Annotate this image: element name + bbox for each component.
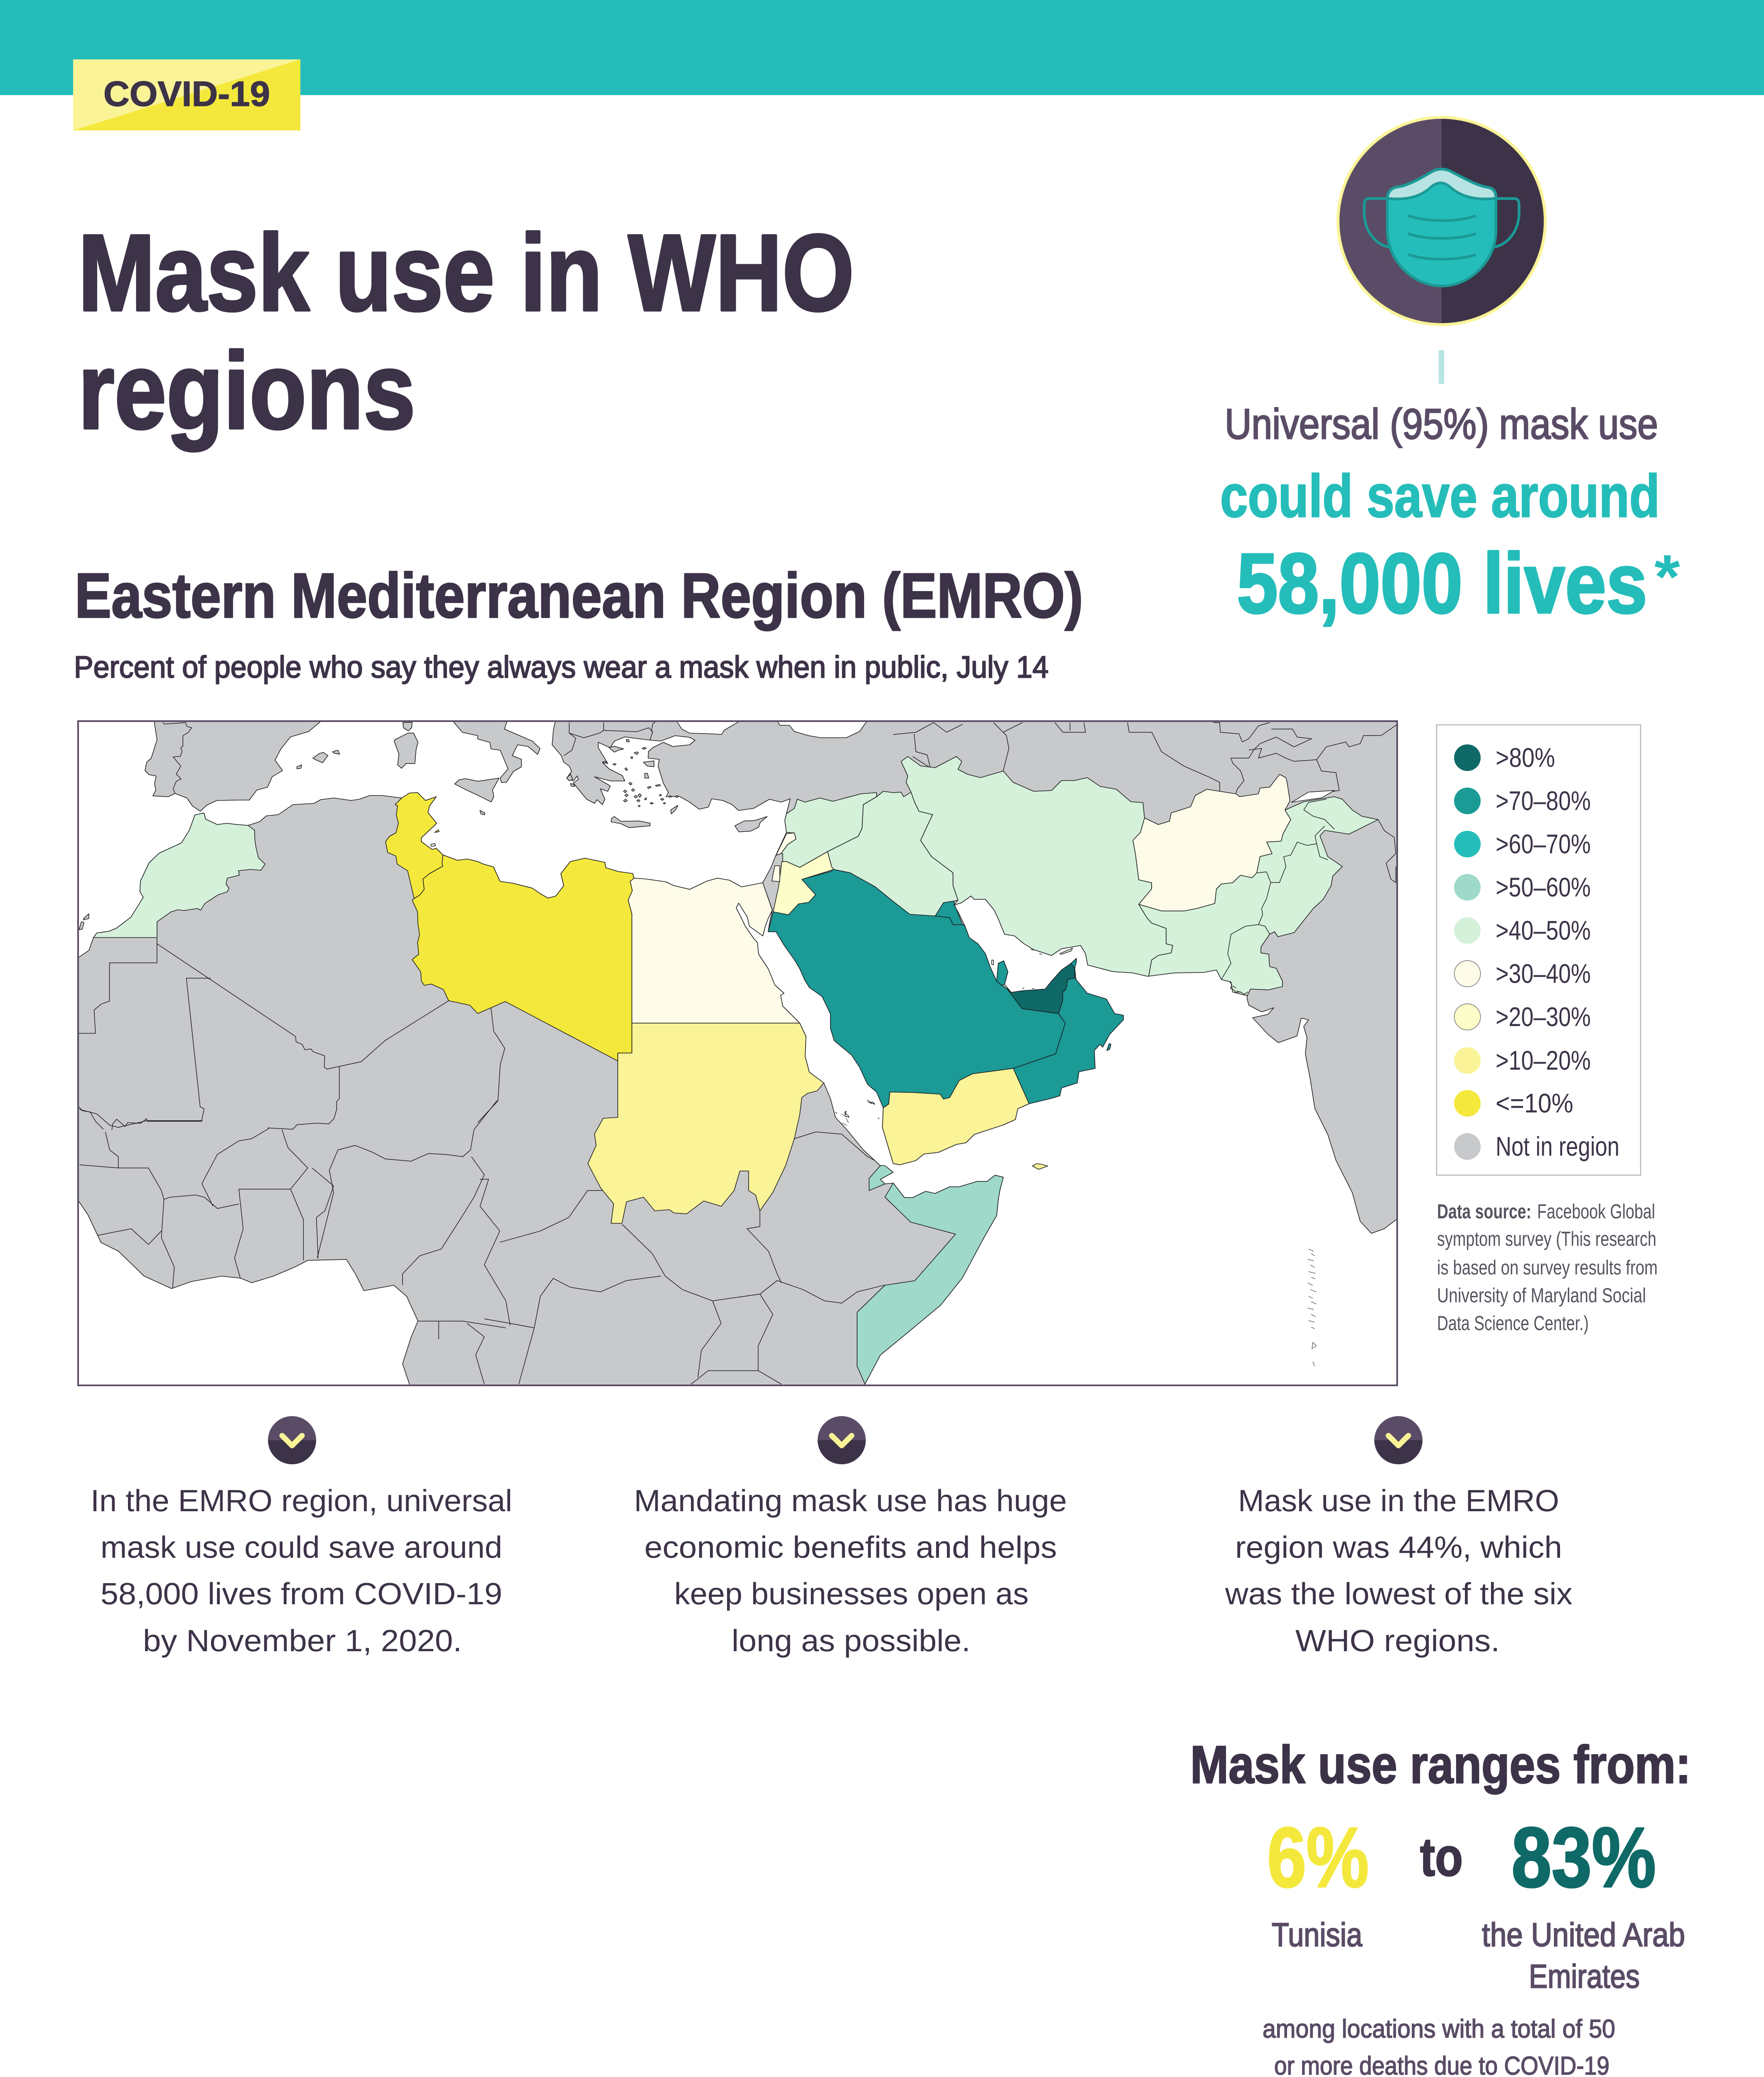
country: Pakistan [992,791,1378,996]
legend item: 40 to 50 percent: >40–50% [1496,915,1591,945]
legend item: 70 to 80 percent: >70–80% [1496,786,1591,816]
islands: western Mediterranean and Atlantic [79,722,499,930]
callout: universal mask use [1220,400,1680,631]
legend item: 10 to 20 percent: >10–20% [1496,1045,1591,1075]
maximum value: 83% [1511,1810,1656,1905]
minimum location: Tunisia [1272,1916,1362,1953]
text block: lives saved: mask use could save around [101,1530,502,1564]
COVID-19 tag: COVID-19 [103,74,270,114]
legend [1437,725,1641,1175]
legend item: greater than 80 percent: >80% [1496,742,1555,773]
country: Syria [781,793,877,867]
country: Palestine [772,866,780,881]
legend item: 30 to 40 percent: >30–40% [1496,958,1591,989]
text block: economic benefits: keep businesses open as [674,1576,1029,1611]
text block: lowest mask use: was the lowest of the six [1225,1576,1572,1611]
sea: eastern Black Sea [778,722,867,738]
data source note: Data Science Center.) [1437,1312,1589,1335]
icon: chevron 3 [1374,1416,1423,1464]
legend item: 20 to 30 percent: >20–30% [1496,1002,1591,1032]
text block: economic benefits: long as possible. [732,1623,970,1658]
country: Qatar [997,961,1008,985]
range heading: Mask use ranges from: [1190,1735,1691,1795]
text block: lives saved: by November 1, 2020. [143,1623,462,1658]
data source note: symptom survey (This research [1437,1228,1656,1250]
country: Sudan [588,1023,824,1223]
minimum value: 6% [1267,1810,1369,1905]
islands: Aegean, Crete and Cyprus [480,740,880,1119]
text block: lowest mask use: region was 44%, which [1235,1530,1562,1564]
text block: lowest mask use: Mask use in the EMRO [1238,1483,1559,1518]
maximum location [1482,1916,1685,1995]
country: Afghanistan [1133,774,1291,911]
legend item: 40 to 50 percent [1454,915,1591,945]
country: Egypt [628,878,800,1023]
legend item: 10 percent or less: <=10% [1496,1088,1573,1118]
choropleth map of EMRO [75,719,1402,1390]
country: Yemen [882,1068,1048,1169]
legend item: 20 to 30 percent [1454,1002,1591,1032]
islands: Maldives and Red Sea islets [842,1102,1316,1366]
data source note: University of Maryland Social [1437,1284,1646,1307]
country: Saudi Arabia [768,869,1065,1108]
title: Mask use in WHO [78,212,854,334]
legend item: greater than 80 percent [1454,742,1555,773]
maximum location: the United Arab [1482,1916,1685,1953]
country: Jordan [773,852,834,915]
icon: chevron 1 [268,1416,316,1464]
legend item: 60 to 70 percent: >60–70% [1496,829,1591,859]
legend item: 60 to 70 percent [1454,829,1591,859]
title [78,212,854,452]
country: Djibouti [869,1166,893,1191]
range qualifier: among locations with a total of 50 [1263,2015,1615,2043]
country: United Arab Emirates [1007,963,1075,1014]
legend item: 50 to 60 percent [1454,872,1591,902]
country: Iraq [828,791,958,916]
text block: economic benefits: economic benefits and helps [644,1530,1057,1564]
data source note [1437,1201,1658,1335]
text block: lowest mask use: WHO regions. [1295,1623,1500,1658]
sea: Black Sea [677,722,739,735]
sea: Atlantic and Mediterranean [75,719,790,958]
sea: Gulf of Guinea [75,1198,418,1390]
country: Iran [901,756,1173,976]
data source note: Facebook Global [1537,1201,1655,1223]
callout: universal mask use: * [1654,542,1680,611]
text block: lowest mask use [1225,1483,1572,1658]
text block: economic benefits: Mandating mask use has huge [634,1483,1067,1518]
country: Lebanon [776,833,796,855]
map frame [78,721,1397,1385]
text block: lives saved [91,1483,512,1658]
COVID-19 tag [73,59,300,130]
top header band [0,0,1764,95]
legend item: 50 to 60 percent: >50–60% [1496,872,1591,902]
callout: universal mask use: 58,000 lives [1237,536,1647,631]
legend item: 10 to 20 percent [1454,1045,1591,1075]
country: Libya [412,855,634,1061]
callout: universal mask use: Universal (95%) mask use [1225,400,1658,448]
text block: lives saved: In the EMRO region, universal [91,1483,512,1518]
legend item: 10 percent or less [1454,1088,1573,1118]
maximum location: Emirates [1529,1958,1640,1995]
country: Morocco [93,813,265,938]
legend item: 70 to 80 percent [1454,786,1591,816]
map subtitle: Percent of people who say they always wear a mask when in public, July 14 [74,650,1049,684]
icon: chevron 2 [818,1416,866,1464]
callout: universal mask use: could save around [1220,462,1660,530]
country: Kuwait [935,901,963,925]
range qualifier [1263,2015,1615,2077]
text block: lives saved: 58,000 lives from COVID-19 [101,1576,502,1611]
country: Tunisia [386,793,443,899]
text block: economic benefits [634,1483,1067,1658]
legend item: not in region: Not in region [1496,1131,1619,1161]
country: Somalia [857,1175,1003,1384]
legend item: 30 to 40 percent [1454,958,1591,989]
country: Oman [1013,958,1123,1104]
connector word: to [1420,1827,1463,1887]
legend item: not in region [1454,1131,1619,1161]
region heading: Eastern Mediterranean Region (EMRO) [75,560,1083,631]
sea: Red Sea, Persian Gulf and Indian Ocean [736,896,1402,1390]
connector tick [1439,350,1444,384]
data source note: Data source: [1437,1201,1531,1223]
title: regions [78,330,415,452]
data source note: is based on survey results from [1437,1257,1658,1279]
mask use range panel [1190,1735,1691,2077]
icon: face mask in circle [1337,116,1547,326]
